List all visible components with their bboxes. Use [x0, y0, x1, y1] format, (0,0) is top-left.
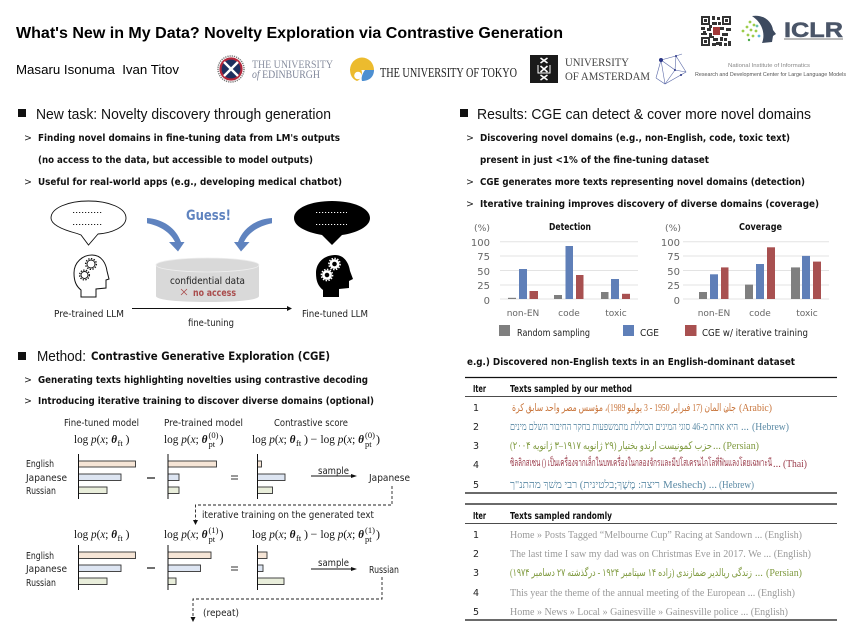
- table: texts sampled by our method: (Arabic): [739, 403, 772, 414]
- table: texts sampled by our method: ריצה: מֶשֶׁךְ;בלטינית) רבי משׁךְ מהתנ"ך: [510, 479, 660, 491]
- heading: method: [18, 349, 330, 365]
- formula row 1: ft: [296, 438, 302, 448]
- title: What's New in My Data? Novelty Exploration via Contrastive Generation: [16, 25, 563, 42]
- bullet text: results: CGE generates more texts representing novel domains (detection): [480, 177, 805, 188]
- QR code: [700, 15, 732, 47]
- formula row 2: log p(x; θ: [164, 527, 208, 541]
- arrow: sample japanese: [311, 466, 410, 484]
- panel: method: [18, 349, 410, 622]
- table: texts sampled randomly: Home » Posts Tagged “Melbourne Cup” Racing at Sandown ... (English): [510, 530, 802, 541]
- bar chart: language scores iteration 1: Russian: [26, 578, 56, 589]
- bullet text: results: Discovering novel domains (e.g., non-English, code, toxic text): [480, 133, 790, 144]
- label: fine-tuned LLM: Fine-tuned LLM: [302, 309, 368, 320]
- table: texts sampled by our method: ...: [773, 459, 781, 470]
- table: texts sampled by our method: جان المان (17 فبراير 1950 - 3 يوليو 1989)، مؤسس مصر واحد سابق كرة: [512, 403, 736, 414]
- formula row 1: log p(x; θ: [164, 432, 208, 446]
- formula row 2: log p(x; θ: [74, 527, 118, 541]
- formula row 2: (1): [208, 525, 219, 535]
- column headers: Fine-tuned model: [64, 418, 139, 429]
- icon: confidential data cylinder: confidential data: [170, 276, 245, 287]
- formula row 2: (1): [365, 525, 375, 535]
- formula row 1: ): [126, 432, 130, 446]
- arrow: repeat dashed: (repeat): [203, 608, 239, 619]
- formula row 2: log p(x; θ: [320, 527, 365, 541]
- table: texts sampled by our method: 1: [473, 403, 479, 414]
- chart legend: CGE w/ iterative training: [702, 328, 808, 339]
- bullet text: method: Generating texts highlighting novelties using contrastive decoding: [38, 375, 368, 386]
- bullet text: results: Iterative training improves discovery of diverse domains (coverage): [480, 199, 819, 210]
- bar chart: detection: 75: [477, 252, 490, 263]
- formula row 2: pt: [208, 534, 216, 544]
- chart legend: CGE: [640, 328, 659, 339]
- table: texts sampled by our method: [465, 378, 837, 493]
- bar chart: detection: 0: [484, 296, 490, 307]
- arrow: iterative training dashed: [193, 486, 392, 525]
- formula row 1: pt: [365, 439, 372, 449]
- arrow: sample russian: sample: [318, 558, 349, 569]
- bullet text: new task: [24, 133, 342, 188]
- table: texts sampled randomly: 1: [473, 530, 479, 541]
- arrow: right guess arrow: [234, 218, 272, 252]
- formula row 1: (0): [365, 430, 375, 440]
- formula row 2: ft: [296, 533, 302, 543]
- formula row 2: log p(x; θ: [252, 527, 296, 541]
- table: texts sampled by our method: 2: [473, 422, 479, 433]
- heading: new task: New task: Novelty discovery through generation: [36, 107, 331, 123]
- bullet text: method: [24, 375, 374, 407]
- table: texts sampled by our method: 4: [473, 460, 479, 471]
- table: texts sampled by our method: ...: [725, 403, 733, 414]
- logo: ICLR: ICLR: [784, 19, 843, 42]
- label: fine-tuning: fine-tuning: [188, 318, 234, 329]
- formula row 2: pt: [365, 534, 372, 544]
- formula row 2: ): [126, 527, 130, 541]
- icon: confidential data cylinder: no access: [193, 288, 236, 299]
- table: texts sampled randomly: زندگی ریالدیر ضمازندی (زاده ۱۴ سپتامبر ۱۹۲۴ - درگذشته ۲۷ دسامبر ۱۹۷۴): [510, 566, 752, 579]
- table: texts sampled randomly: Home » News » Local » Gainesville » Gainesville police ... (English): [510, 607, 788, 618]
- bullet text: new task: Finding novel domains in fine-tuning data from LM's outputs: [38, 133, 340, 144]
- bar chart: coverage: Coverage: [739, 222, 782, 233]
- bullet text: method: Introducing iterative training to discover diverse domains (optional): [38, 396, 374, 407]
- icon: confidential data cylinder: [156, 258, 259, 302]
- arrow: sample russian: [311, 558, 399, 576]
- logo: University of Edinburgh: THE UNIVERSITY: [252, 59, 334, 71]
- formula row 1: [74, 430, 380, 449]
- arrow: left guess arrow: [147, 218, 184, 252]
- bullet text: method: >: [24, 396, 32, 407]
- bar chart: language scores iteration 0: Japanese: [25, 473, 67, 484]
- table: texts sampled by our method: 3: [473, 441, 479, 452]
- formula row 2: ): [220, 527, 224, 541]
- formula row 1: ): [304, 432, 308, 446]
- bullet text: results: >: [466, 177, 474, 188]
- icon: pre-trained head: [74, 255, 109, 297]
- bar chart: detection: toxic: [605, 309, 627, 319]
- bullet text: new task: >: [24, 133, 32, 144]
- label: pre-trained LLM: Pre-trained LLM: [54, 309, 124, 320]
- column headers: Contrastive score: [274, 418, 348, 429]
- table: texts sampled randomly: ...: [755, 568, 763, 579]
- logo: University of Edinburgh: [218, 56, 334, 82]
- table: texts sampled by our method: היא אחת מ-46 סוגי המינים הכוללת מתמשפעות בחקר החיבור השלם מינים: [510, 421, 738, 433]
- logo: NII LLMC: Research and Development Center for Large Language Models: [695, 72, 846, 78]
- formula row 2: ft: [118, 533, 123, 543]
- table: texts sampled by our method: Iter: [473, 384, 486, 395]
- bar chart: coverage: [661, 222, 829, 319]
- bullet text: results: present in just <1% of the fine-tuning dataset: [480, 155, 709, 166]
- icon: fine-tuned head: [316, 255, 353, 297]
- bar chart: language scores iteration 1: English: [26, 551, 54, 562]
- arrow: fine-tuning: [132, 306, 292, 311]
- formula row 2: −: [310, 527, 318, 541]
- bullet text: new task: >: [24, 177, 32, 188]
- bar chart: coverage: non-EN: [698, 309, 730, 319]
- logo: University of Edinburgh: of EDINBURGH: [252, 69, 320, 81]
- table: texts sampled randomly: The last time I saw my dad was on Christmas Eve in 2017. We ... (English): [510, 549, 811, 560]
- table: texts sampled randomly: 3: [473, 568, 479, 579]
- chart legend: [499, 325, 808, 339]
- authors: Masaru Isonuma Ivan Titov: [16, 63, 180, 77]
- logo: University of Tokyo: [350, 58, 517, 81]
- table: texts sampled randomly: 4: [473, 588, 479, 599]
- formula row 1: −: [310, 432, 318, 446]
- formula row 2: ): [304, 527, 308, 541]
- logo: University of Amsterdam: OF AMSTERDAM: [565, 69, 650, 83]
- bar chart: detection: Detection: [549, 222, 591, 233]
- bar chart: detection: 100: [471, 238, 490, 249]
- column headers: [64, 418, 348, 429]
- logo: ICLR: [742, 16, 843, 43]
- bar chart: coverage: 100: [661, 238, 680, 249]
- heading: method: Contrastive Generative Exploration (CGE): [91, 349, 330, 363]
- icon: black speech bubble: [294, 201, 370, 245]
- table: texts sampled by our method: حزب کمونیست ارندو بختیار (۲۹ ژانویه ۱۹۱۷–۳ ژانویه ۲۰۰۴): [510, 441, 712, 452]
- bar chart: detection: 25: [477, 281, 490, 292]
- bar chart: coverage: 25: [667, 281, 680, 292]
- bullet text: new task: (no access to the data, but accessible to model outputs): [38, 155, 313, 166]
- icon: white speech bubble: [51, 201, 126, 245]
- bullet text: results: >: [466, 199, 474, 210]
- table: texts sampled randomly: 2: [473, 549, 479, 560]
- logo: University of Amsterdam: UNIVERSITY: [565, 55, 629, 69]
- bar chart: language scores iteration 0: Russian: [26, 486, 56, 497]
- bar chart: detection: 50: [477, 267, 490, 278]
- bar chart: detection: (%): [474, 224, 490, 234]
- bar chart: coverage: (%): [665, 224, 681, 234]
- arrow: sample russian: Russian: [369, 565, 399, 576]
- formula row 1: log p(x; θ: [74, 432, 118, 446]
- table: texts sampled randomly: 5: [473, 607, 479, 618]
- bullet text: results: [466, 133, 819, 210]
- logo: NII LLMC: [656, 54, 846, 84]
- arrow: iterative training dashed: iterative training on the generated text: [202, 510, 374, 521]
- formula row 1: log p(x; θ: [320, 432, 365, 446]
- table: texts sampled by our method: Texts sampled by our method: [510, 384, 632, 395]
- table: texts sampled by our method: (Hebrew): [752, 422, 789, 433]
- panel: new task: [18, 107, 370, 329]
- formula row 1: ): [220, 432, 224, 446]
- heading: results: Results: CGE can detect & cover more novel domains: [477, 107, 811, 123]
- heading: discovered texts: e.g.) Discovered non-English texts in an English-dominant dataset: [467, 357, 795, 368]
- formula row 1: ): [376, 432, 380, 446]
- table: texts sampled by our method: (Hebrew): [719, 480, 754, 491]
- bullet text: new task: Useful for real-world apps (e.g., developing medical chatbot): [38, 177, 342, 188]
- bar chart: coverage: 50: [667, 267, 680, 278]
- bar chart: detection: [471, 222, 638, 319]
- table: texts sampled randomly: (Persian): [766, 568, 802, 579]
- bullet text: results: >: [466, 133, 474, 144]
- column headers: Pre-trained model: [164, 418, 243, 429]
- formula row 1: ft: [118, 438, 123, 448]
- panel: results: [460, 107, 837, 620]
- bar chart: detection: non-EN: [507, 309, 539, 319]
- label: guess: Guess!: [186, 208, 231, 224]
- logo: University of Tokyo: THE UNIVERSITY OF TOKYO: [380, 65, 517, 80]
- bar chart: language scores iteration 1: [25, 545, 284, 590]
- logo: NII LLMC: National Institute of Informatics: [728, 63, 810, 69]
- bar chart: language scores iteration 0: English: [26, 459, 54, 470]
- arrow: sample japanese: sample: [318, 466, 349, 477]
- table: texts sampled by our method: ...: [741, 422, 749, 433]
- formula row 2: ): [376, 527, 380, 541]
- arrow: repeat dashed: [190, 577, 382, 622]
- formula row 1: (0): [208, 430, 219, 440]
- bar chart: coverage: toxic: [796, 309, 818, 319]
- bar chart: language scores iteration 0: [25, 454, 285, 499]
- bar chart: coverage: 75: [667, 252, 680, 263]
- bar chart: coverage: 0: [674, 296, 680, 307]
- formula row 1: pt: [208, 439, 216, 449]
- bullet text: method: >: [24, 375, 32, 386]
- arrow: sample japanese: Japanese: [368, 473, 410, 484]
- table: texts sampled by our method: ...: [713, 441, 721, 452]
- formula row 1: log p(x; θ: [252, 432, 296, 446]
- table: texts sampled by our method: Meshech) ...: [663, 480, 717, 491]
- table: texts sampled by our method: (Persian): [723, 441, 759, 452]
- logo: University of Amsterdam: [530, 55, 650, 83]
- table: texts sampled randomly: Iter: [473, 511, 486, 522]
- heading: method: Method:: [37, 349, 86, 365]
- bar chart: detection: code: [558, 309, 580, 319]
- table: texts sampled randomly: [465, 504, 837, 620]
- chart legend: Random sampling: [517, 328, 590, 339]
- bar chart: coverage: code: [749, 309, 771, 319]
- bar chart: language scores iteration 1: Japanese: [25, 564, 67, 575]
- table: texts sampled by our method: 5: [473, 480, 479, 491]
- table: texts sampled by our method: (Thai): [783, 459, 807, 470]
- diagram: guess confidential data: [51, 201, 370, 329]
- table: texts sampled randomly: This year the theme of the annual meeting of the European ... (English): [510, 588, 795, 599]
- table: texts sampled randomly: Texts sampled randomly: [510, 511, 612, 522]
- formula row 2: [74, 525, 380, 544]
